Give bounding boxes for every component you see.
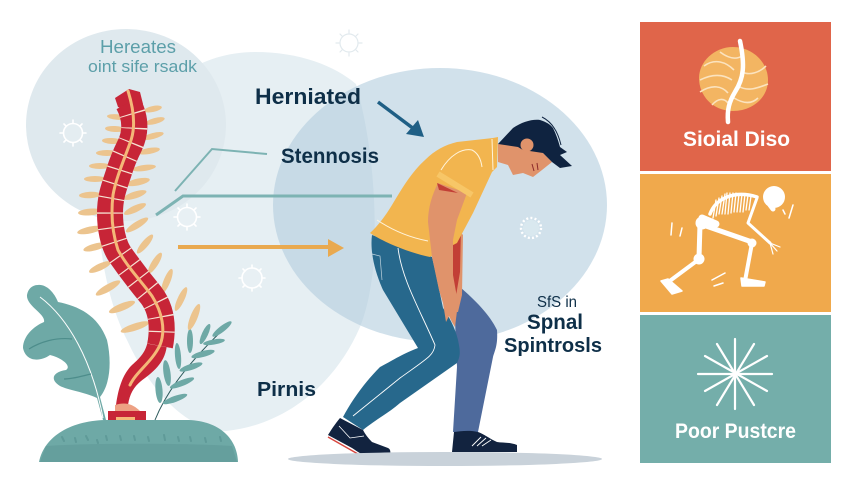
spine illustration bbox=[77, 89, 203, 420]
neck and face bbox=[498, 144, 552, 177]
trouser pocket bbox=[372, 254, 382, 280]
ground shadow bbox=[288, 452, 602, 466]
heading: top-left label bbox=[88, 37, 198, 76]
front leg bbox=[343, 235, 460, 430]
icon: sun middle bbox=[174, 204, 200, 230]
shirt bbox=[370, 137, 498, 257]
label: Spinal stenosis bbox=[504, 294, 602, 357]
back shoe bbox=[452, 431, 517, 453]
leader line: stenosis bbox=[175, 149, 267, 191]
icon: dotted circle bbox=[521, 218, 541, 238]
plant: fern bbox=[154, 319, 233, 420]
background circle: blue behind person bbox=[273, 68, 607, 342]
sleeve cuff bbox=[438, 174, 472, 195]
front shoe bbox=[328, 418, 390, 458]
back leg bbox=[453, 287, 497, 432]
arrow: navy bbox=[378, 102, 424, 137]
icon: starburst bbox=[698, 339, 772, 409]
label: Spinal stenosis: Spintrosls bbox=[504, 335, 602, 357]
panel: teal posture bbox=[640, 315, 831, 463]
trouser seam bbox=[353, 248, 435, 416]
ground mound bbox=[39, 420, 238, 462]
back arm shade bbox=[453, 227, 461, 296]
icon: disc leaf bbox=[699, 41, 768, 122]
icon: sun top bbox=[336, 30, 362, 56]
panel title: Poor Pustcre bbox=[675, 420, 796, 443]
lower spine column bbox=[116, 338, 167, 405]
sleeve shadow bbox=[437, 183, 458, 193]
leader line: long teal bbox=[156, 196, 392, 215]
background circle: upper left bbox=[26, 29, 226, 221]
spine base bbox=[108, 403, 146, 420]
ribs / spinal processes bbox=[77, 104, 203, 335]
icon: sun left bbox=[60, 120, 86, 146]
icon: bent skeleton bbox=[661, 186, 793, 294]
plant: large leaf bbox=[23, 285, 110, 420]
person bending bbox=[328, 117, 572, 458]
arm bbox=[428, 183, 467, 327]
vertebrae separators bbox=[110, 103, 162, 346]
label: Pirnis: Pirnis bbox=[257, 379, 316, 401]
icon: sun lower bbox=[239, 265, 265, 291]
label: Stennosis: Stennosis bbox=[281, 145, 379, 168]
eye bbox=[532, 163, 538, 171]
hair motion line bbox=[542, 117, 561, 145]
label: Herniated: Herniated bbox=[255, 84, 361, 109]
label: Spinal stenosis: Spnal bbox=[527, 311, 583, 334]
arrow: orange bbox=[178, 239, 344, 257]
panel title: Sioial Diso bbox=[683, 128, 790, 151]
back arm bbox=[450, 225, 463, 312]
ear bbox=[520, 138, 534, 152]
heading: top-left label: oint sife rsadk bbox=[88, 57, 198, 76]
vertebrae column bbox=[110, 103, 162, 346]
top vertebra bbox=[115, 89, 143, 112]
heading: top-left label: Hereates bbox=[100, 37, 176, 57]
spinal cord line bbox=[112, 91, 163, 385]
panel: orange skeleton bbox=[640, 174, 831, 312]
shirt details bbox=[377, 139, 493, 241]
background blob: pale large bbox=[100, 52, 375, 431]
hair bbox=[498, 120, 572, 168]
label: Spinal stenosis: SfS in bbox=[537, 294, 577, 311]
panel: red disc bbox=[640, 22, 831, 171]
